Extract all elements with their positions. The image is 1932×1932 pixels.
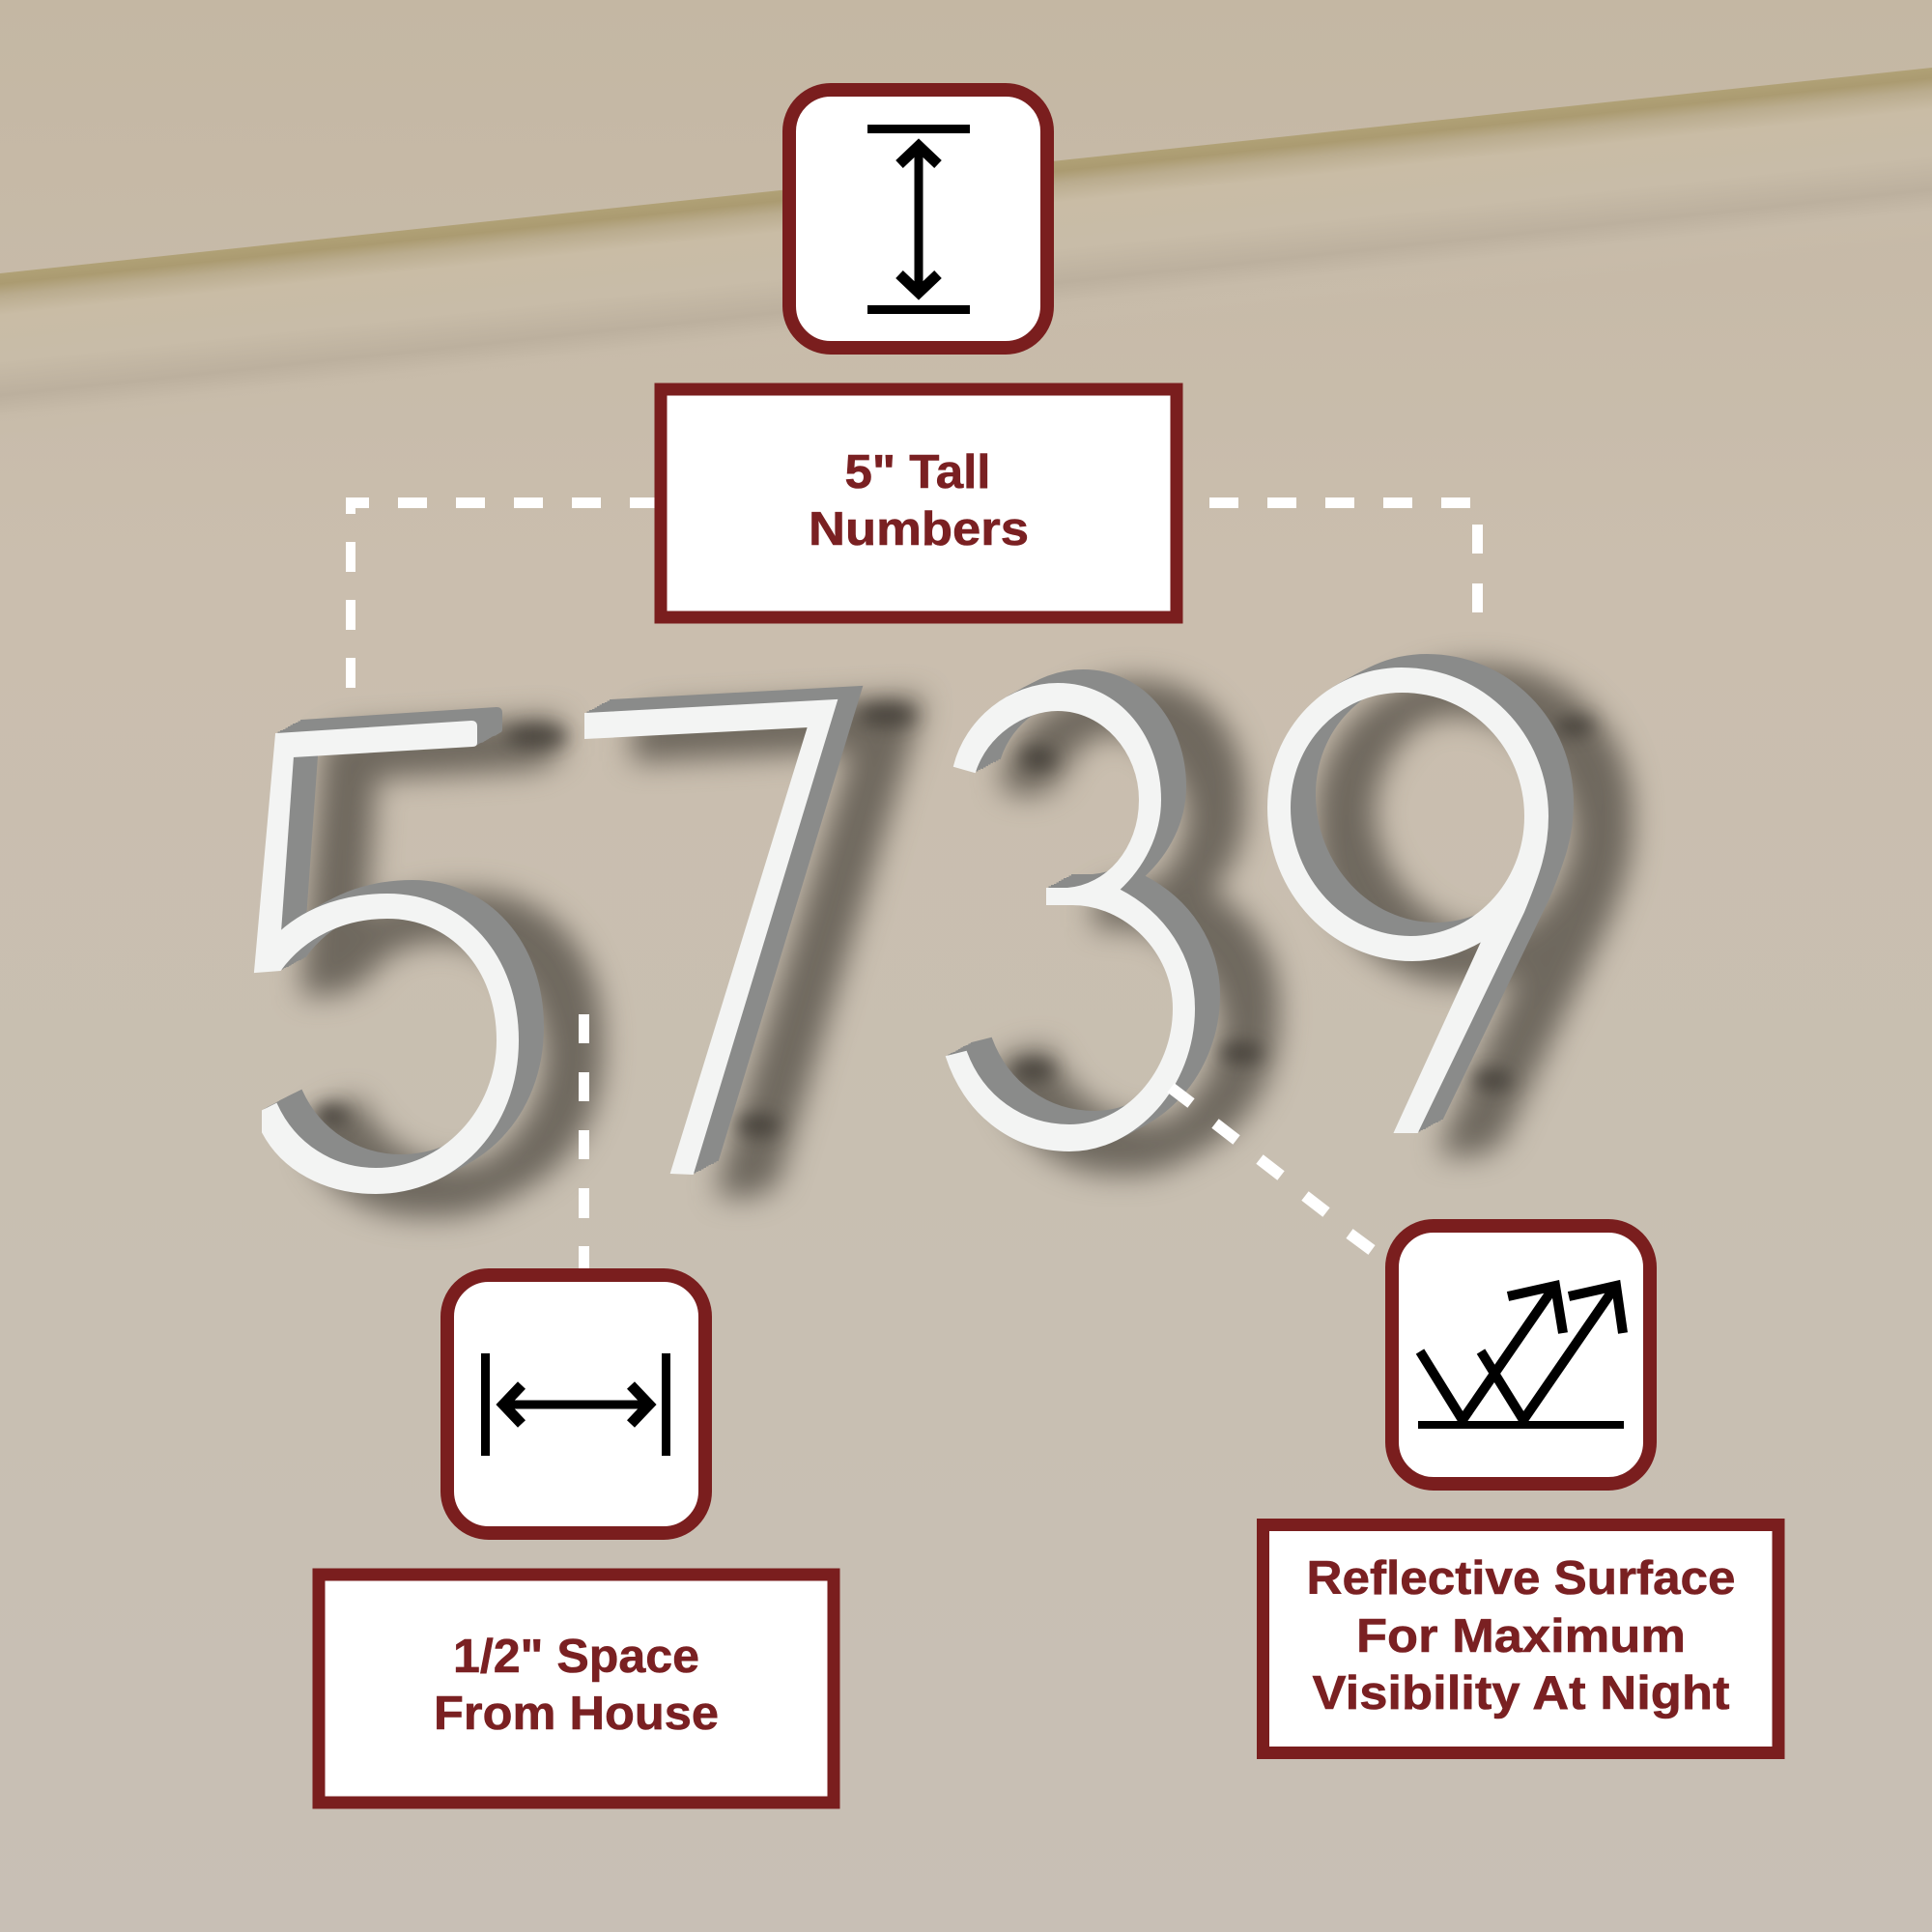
label: reflective surface for maximum visibility at night [1264, 1524, 1778, 1752]
icon: height (top) [789, 90, 1047, 348]
label: reflective surface for maximum visibility at night: Reflective Surface [1306, 1552, 1735, 1605]
dark shadow spots behind the numbers [314, 703, 1594, 1137]
dashed connector: space from house [579, 1014, 589, 1269]
icon: space from house (left) [447, 1275, 705, 1533]
number 3 [947, 684, 1194, 1151]
label: 1/2" space from house [319, 1575, 834, 1803]
label: 1/2" space from house: From House [434, 1688, 719, 1740]
label: 1/2" space from house: 1/2" Space [453, 1631, 699, 1683]
dashed connector: reflective surface [1171, 1088, 1372, 1250]
dashed connector: height bracket left [346, 497, 655, 688]
house numbers 5739 on the wall [255, 668, 1548, 1193]
label: reflective surface for maximum visibility at night: Visibility At Night [1312, 1667, 1729, 1719]
number 5 [255, 722, 518, 1193]
dashed connector: height bracket right [1209, 497, 1483, 612]
background: roof trim band [0, 48, 1932, 457]
icon: reflective surface (right) [1392, 1226, 1650, 1484]
label: reflective surface for maximum visibility at night: For Maximum [1356, 1610, 1686, 1662]
number 7 [585, 700, 837, 1174]
label: 5" tall numbers: 5" Tall [844, 446, 991, 498]
label: 5" tall numbers [661, 389, 1177, 617]
label: 5" tall numbers: Numbers [809, 503, 1029, 555]
number 9 [1268, 668, 1548, 1132]
